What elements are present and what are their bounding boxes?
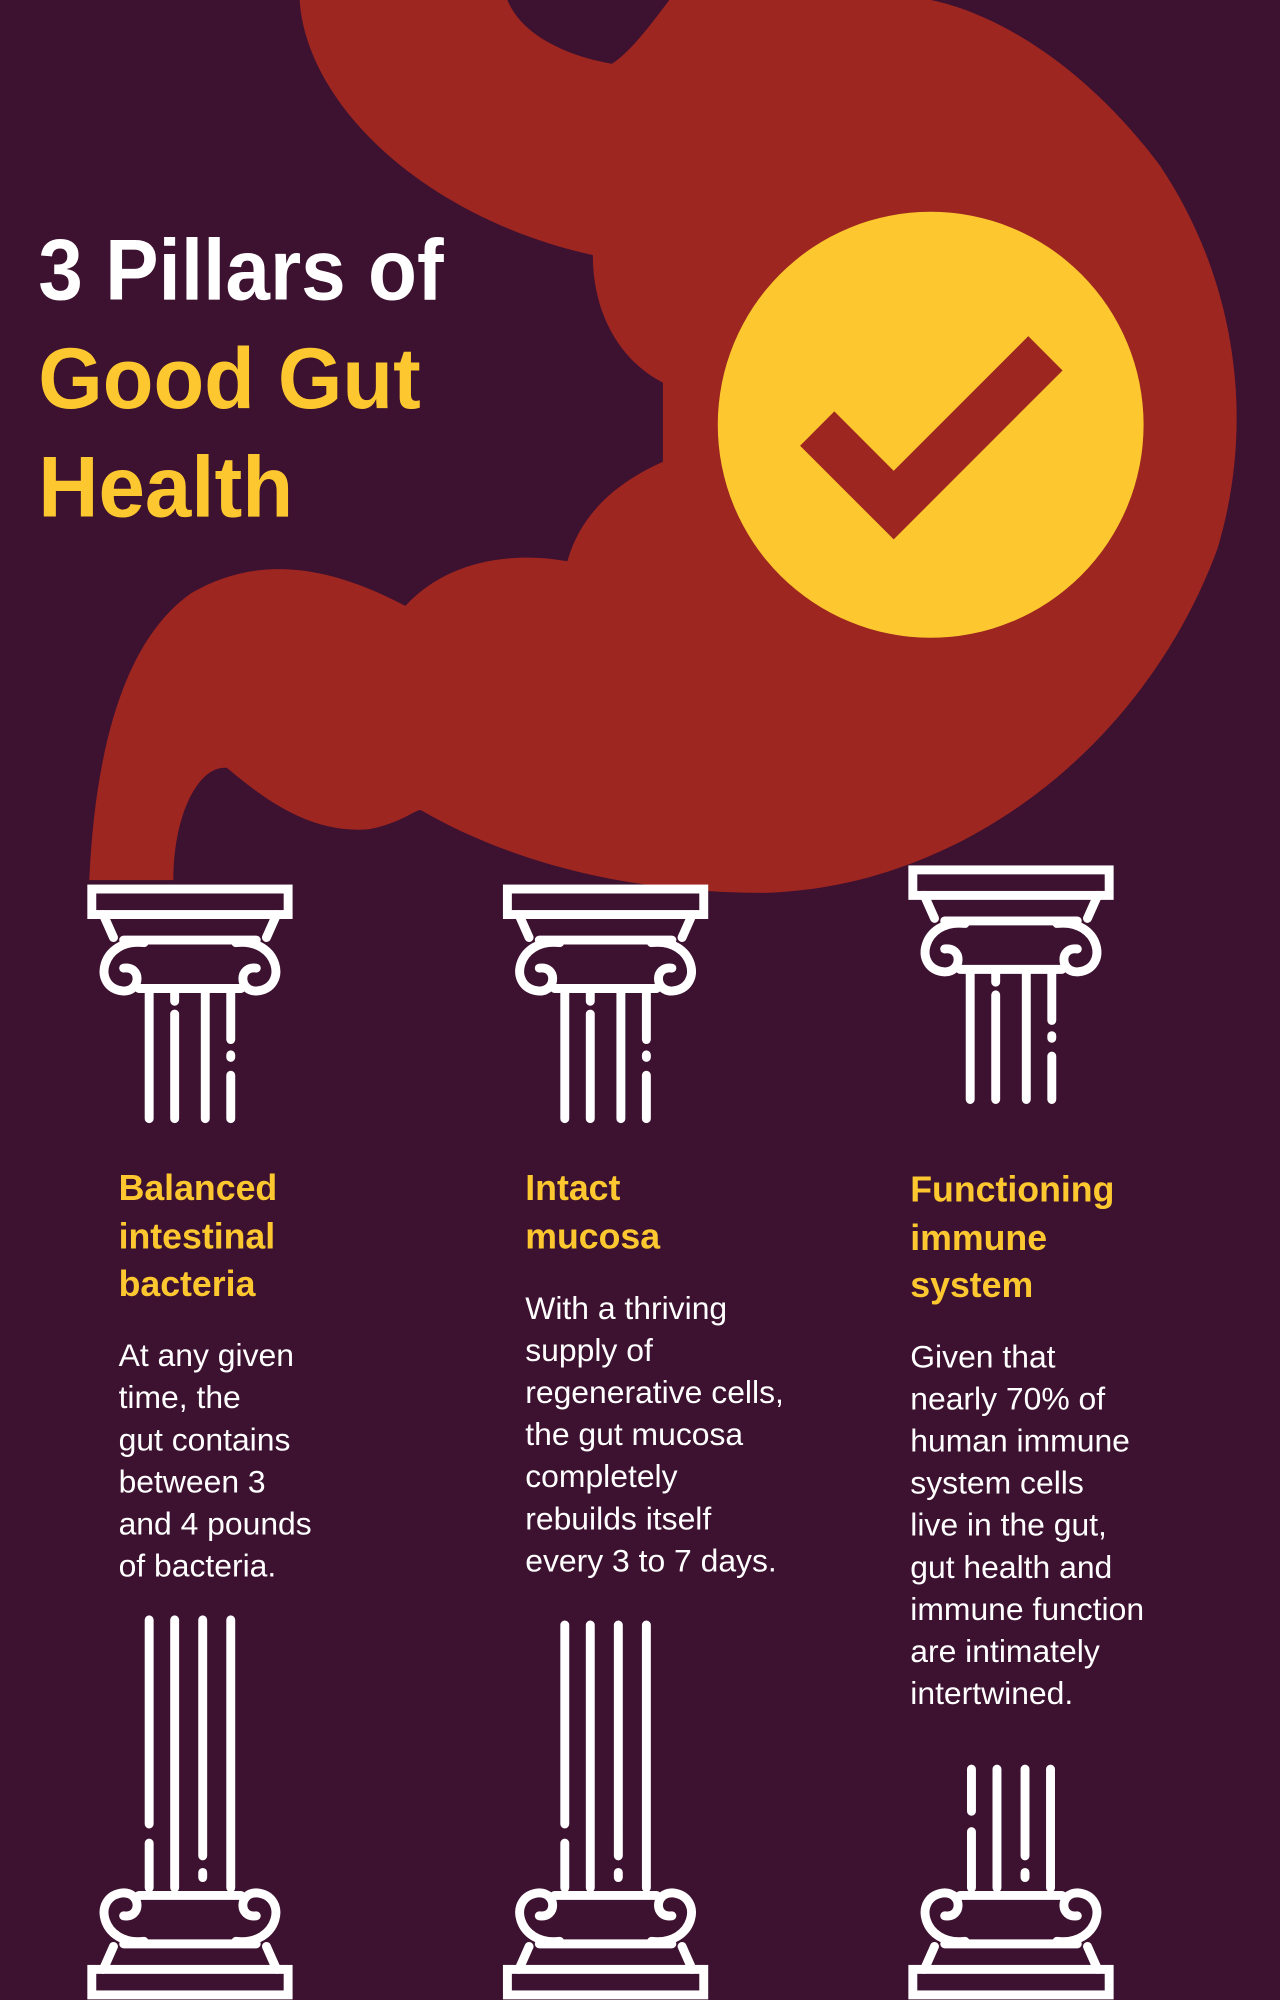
panel: functioning immune system: system cells (910, 1465, 1084, 1501)
panel: balanced intestinal bacteria: gut contains (119, 1421, 290, 1457)
icon: pillar base 2 (507, 1625, 704, 1995)
panel: functioning immune system: system (910, 1265, 1033, 1305)
icon: pillar capital 2 (507, 889, 704, 1119)
icon: pillar capital 1 (92, 889, 288, 1119)
panel: balanced intestinal bacteria: between 3 (119, 1463, 266, 1499)
panel: intact mucosa: Intact (525, 1168, 621, 1208)
panel: functioning immune system: Given that (910, 1338, 1056, 1374)
panel: balanced intestinal bacteria: Balanced (119, 1168, 277, 1208)
panel: functioning immune system: Functioning (910, 1170, 1114, 1210)
panel: intact mucosa: every 3 to 7 days. (525, 1542, 777, 1578)
panel: intact mucosa: regenerative cells, (525, 1374, 784, 1410)
panel: functioning immune system: are intimately (910, 1633, 1100, 1669)
title: Good Gut (38, 331, 421, 427)
panel: balanced intestinal bacteria: bacteria (119, 1264, 257, 1304)
panel: intact mucosa: With a thriving (525, 1290, 727, 1326)
panel: functioning immune system: nearly 70% of (910, 1380, 1105, 1416)
title: 3 Pillars of (38, 223, 445, 319)
panel: functioning immune system: human immune (910, 1423, 1130, 1459)
panel: functioning immune system (910, 1170, 1144, 1711)
panel: functioning immune system: immune function (910, 1591, 1144, 1627)
title (38, 223, 445, 536)
panel: balanced intestinal bacteria (119, 1168, 312, 1584)
panel: balanced intestinal bacteria: time, the (119, 1379, 241, 1415)
panel: intact mucosa (525, 1168, 784, 1578)
icon: yellow checkmark circle (718, 212, 1144, 638)
panel: balanced intestinal bacteria: At any given (119, 1337, 294, 1373)
panel: intact mucosa: the gut mucosa (525, 1416, 743, 1452)
panel: intact mucosa: mucosa (525, 1217, 661, 1257)
panel: intact mucosa: rebuilds itself (525, 1500, 711, 1536)
panel: functioning immune system: immune (910, 1218, 1047, 1258)
panel: functioning immune system: gut health and (910, 1549, 1112, 1585)
title: Health (38, 440, 293, 536)
icon: pillar base 1 (92, 1620, 288, 1995)
panel: balanced intestinal bacteria: and 4 pounds (119, 1505, 312, 1541)
stomach illustration (89, 0, 1237, 893)
panel: balanced intestinal bacteria: of bacteria. (119, 1548, 276, 1584)
panel: intact mucosa: completely (525, 1458, 678, 1494)
panel: intact mucosa: supply of (525, 1332, 653, 1368)
icon: pillar capital 3 (913, 870, 1109, 1099)
panel: balanced intestinal bacteria: intestinal (119, 1217, 275, 1257)
icon: pillar base 3 (913, 1769, 1109, 1995)
panel: functioning immune system: intertwined. (910, 1675, 1073, 1711)
panel: functioning immune system: live in the gut, (910, 1507, 1107, 1543)
